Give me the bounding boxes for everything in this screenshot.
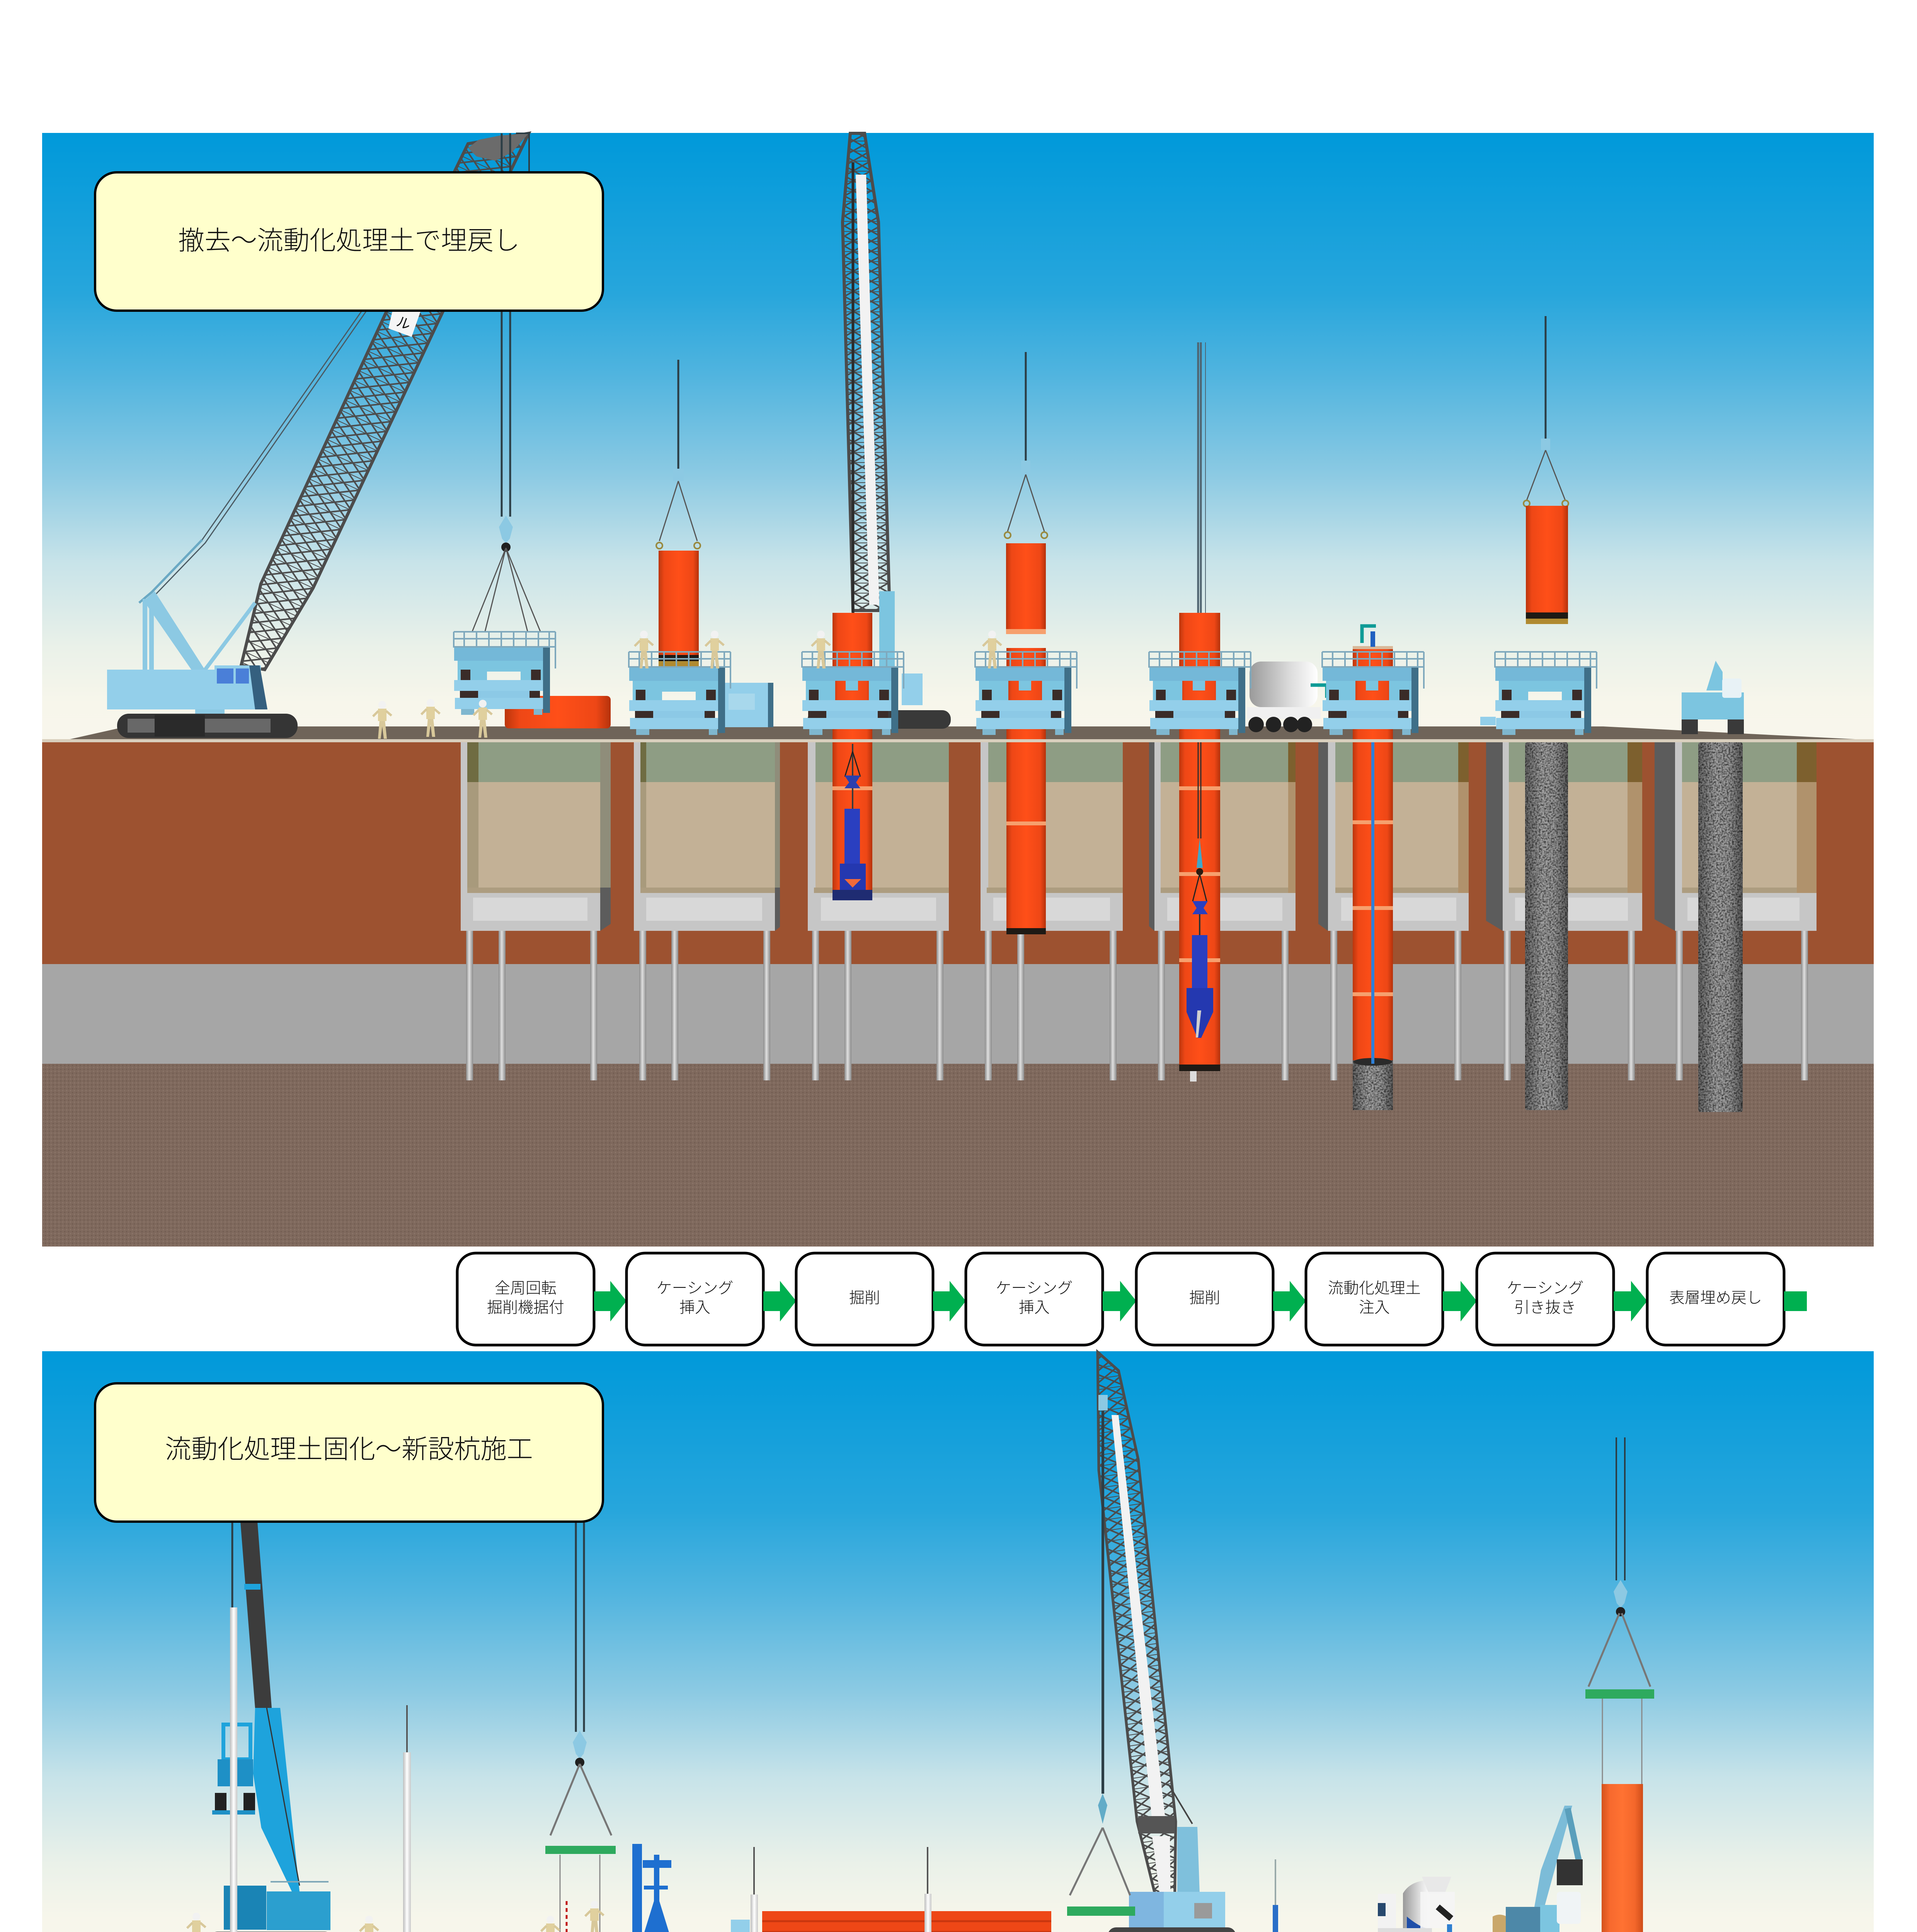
step: excavation xyxy=(1136,1253,1273,1345)
red casing stock xyxy=(762,1911,1051,1932)
boom banner: ル xyxy=(394,313,413,333)
mixer tank truck xyxy=(1247,662,1321,732)
existing foundations xyxy=(461,742,1817,931)
drill xyxy=(1187,742,1213,1038)
step: excavation: 掘削 xyxy=(849,1289,880,1306)
rotator 4 xyxy=(975,652,1077,735)
ground strata xyxy=(42,742,1874,1247)
panel: solidification and new pile scene xyxy=(42,1351,1874,1932)
new fill columns xyxy=(1525,742,1743,1112)
column 4 with bucket xyxy=(734,1847,775,1932)
sky xyxy=(42,133,1874,742)
step: fluidized soil xyxy=(1306,1253,1443,1345)
title box 1 xyxy=(95,172,603,311)
column 8 with concrete placement xyxy=(1415,1924,1483,1932)
surface line xyxy=(42,739,1874,742)
boom banner xyxy=(388,311,421,337)
rotator 3 xyxy=(802,652,904,735)
light blue box xyxy=(731,1920,750,1932)
step: excavation: 掘削 xyxy=(1189,1289,1220,1306)
step: casing removal: ケーシング xyxy=(1507,1280,1584,1297)
existing piles xyxy=(466,931,1808,1080)
casing with drill, unit 3 xyxy=(833,613,872,900)
workers on ground xyxy=(373,699,492,739)
arrow xyxy=(933,1281,966,1321)
casing pair, unit 4 xyxy=(1004,352,1047,934)
step: rotator setup: 掘削機据付 xyxy=(487,1299,564,1316)
step: casing insert xyxy=(966,1253,1103,1345)
arrow xyxy=(1103,1281,1136,1321)
blue casing tool xyxy=(632,1844,679,1932)
panel: removal and backfill scene xyxy=(42,133,1874,1247)
step: surface backfill xyxy=(1647,1253,1784,1345)
excavator side view xyxy=(1493,1806,1583,1932)
step: casing removal xyxy=(1477,1253,1614,1345)
platform extension xyxy=(1480,717,1496,725)
crane behind rotator 3 xyxy=(808,133,951,729)
workers xyxy=(187,1901,604,1932)
casing rod xyxy=(230,1607,237,1932)
casing with tremie, unit 6 xyxy=(1311,626,1393,1110)
arrow xyxy=(763,1281,796,1321)
title box 1: 撤去〜流動化処理土で埋戻し xyxy=(178,226,520,255)
arrow xyxy=(594,1281,627,1321)
step: casing removal: 引き抜き xyxy=(1514,1299,1576,1316)
rotator 2 xyxy=(629,652,730,735)
rotary head xyxy=(212,1725,255,1815)
title box 2 xyxy=(95,1383,603,1522)
mixer truck xyxy=(1377,1877,1455,1932)
column 2 with excavating bucket xyxy=(386,1705,428,1932)
arrow xyxy=(1273,1281,1306,1321)
arrow xyxy=(1443,1281,1477,1321)
step: fluidized soil: 注入 xyxy=(1359,1299,1390,1316)
crane 2 hook and beam xyxy=(1067,1395,1135,1916)
title box 2: 流動化処理土固化〜新設杭施工 xyxy=(165,1435,533,1464)
crawler crane 2 xyxy=(1098,1352,1236,1932)
column 5 with widening bucket xyxy=(896,1847,960,1932)
lying casing xyxy=(505,696,611,728)
pile driver rig xyxy=(208,1522,334,1932)
step: casing insert: ケーシング xyxy=(656,1280,734,1297)
sky xyxy=(42,1351,1874,1932)
rotator 7 xyxy=(1495,652,1597,735)
step: excavation xyxy=(796,1253,933,1345)
casing with drill, unit 5 xyxy=(1179,342,1220,1082)
arrow xyxy=(1614,1281,1647,1321)
work surface gravel xyxy=(70,726,1855,739)
drill xyxy=(833,744,872,900)
column 7 with tremie xyxy=(1241,1859,1309,1932)
crawler crane 1 with lattice boom xyxy=(107,133,529,738)
step: rotator setup: 全周回転 xyxy=(495,1280,557,1297)
workers on rotators xyxy=(635,631,1001,668)
step: rotator setup xyxy=(457,1253,594,1345)
continuation arrow stub xyxy=(1784,1291,1807,1311)
upper casing hanging unit 2 xyxy=(656,360,700,667)
column 9 and extracted casing xyxy=(1585,1437,1656,1932)
column 3 with casing xyxy=(545,1522,616,1932)
step: casing insert: 挿入 xyxy=(1019,1299,1050,1316)
step: casing insert: 挿入 xyxy=(679,1299,710,1316)
step: fluidized soil: 流動化処理土 xyxy=(1328,1280,1421,1297)
upper casing, unit 7 xyxy=(1524,316,1568,624)
step: casing insert xyxy=(627,1253,763,1345)
equipment box behind rotator 2 xyxy=(721,683,773,727)
step: casing insert: ケーシング xyxy=(996,1280,1073,1297)
crane 1 hoist wires and hook xyxy=(472,133,540,631)
hanging rotator xyxy=(454,632,555,715)
rotator 6 xyxy=(1322,652,1424,735)
small excavator front view xyxy=(1682,661,1744,734)
step flow 1 xyxy=(457,1253,1807,1345)
rotator 5 xyxy=(1149,652,1251,735)
step: surface backfill: 表層埋め戻し xyxy=(1669,1289,1762,1306)
